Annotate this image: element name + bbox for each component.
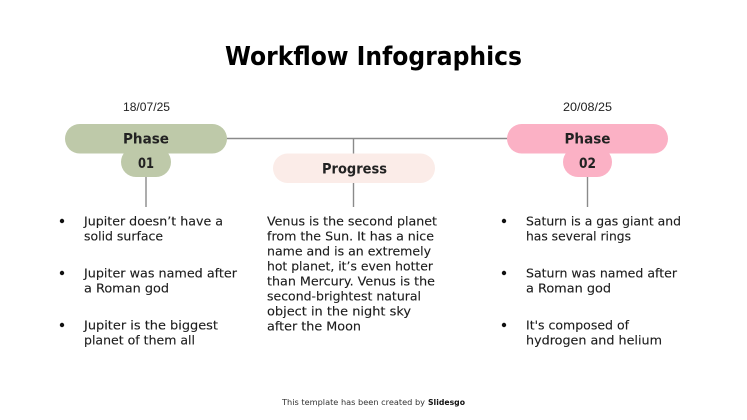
progress paragraph: Venus: from the Sun. It has a nice bbox=[267, 230, 434, 244]
bullet list: Saturn: hydrogen and helium bbox=[526, 334, 662, 348]
title: Workflow Infographics bbox=[225, 42, 522, 72]
phase 01 badge: 01 bbox=[138, 156, 154, 172]
bullet list: Saturn: has several rings bbox=[526, 230, 631, 244]
date: phase 02: 20/08/25 bbox=[563, 100, 612, 114]
footer credit: Slidesgo bbox=[428, 398, 465, 407]
progress paragraph: Venus: Venus is the second planet bbox=[267, 214, 437, 228]
phase 02 badge bbox=[507, 124, 668, 177]
bullet list: Saturn: It's composed of bbox=[526, 318, 630, 332]
bullet list: Saturn: Saturn was named after bbox=[526, 266, 678, 280]
phase 02 stem bbox=[586, 177, 588, 207]
phase 02 badge: Phase bbox=[564, 132, 611, 148]
phase 01 stem bbox=[145, 177, 147, 207]
bullet list: Saturn bbox=[502, 214, 681, 348]
progress paragraph: Venus: hot planet, it’s even hotter bbox=[267, 260, 434, 274]
bullet list: Jupiter: Jupiter is the biggest bbox=[83, 318, 218, 332]
phase 02 badge: 02 bbox=[579, 156, 596, 172]
progress paragraph: Venus: after the Moon bbox=[267, 320, 361, 334]
phase 01 badge bbox=[65, 124, 227, 177]
progress paragraph: Venus: name and is an extremely bbox=[267, 244, 431, 258]
bullet list: Jupiter bbox=[60, 214, 238, 348]
phase 01 badge: Phase bbox=[123, 132, 169, 148]
progress pill: Progress bbox=[322, 162, 387, 178]
bullet list: Jupiter: solid surface bbox=[84, 230, 163, 244]
progress paragraph: Venus: than Mercury. Venus is the bbox=[267, 274, 435, 288]
bullet list: Jupiter: Jupiter was named after bbox=[83, 266, 238, 280]
bullet list: Jupiter: planet of them all bbox=[84, 334, 195, 348]
footer credit: This template has been created by bbox=[281, 398, 426, 407]
bullet list: Jupiter: a Roman god bbox=[84, 282, 169, 296]
bullet list: Saturn: a Roman god bbox=[526, 282, 611, 296]
bullet list: Jupiter: Jupiter doesn’t have a bbox=[83, 214, 223, 228]
progress paragraph: Venus: object in the night sky bbox=[267, 304, 411, 318]
bullet list: Saturn: Saturn is a gas giant and bbox=[526, 214, 681, 228]
timeline connector bbox=[225, 138, 508, 207]
progress paragraph: Venus: second-brightest natural bbox=[267, 290, 421, 304]
progress paragraph: Venus bbox=[267, 214, 437, 334]
progress pill bbox=[273, 154, 435, 183]
date: phase 01: 18/07/25 bbox=[123, 100, 170, 114]
